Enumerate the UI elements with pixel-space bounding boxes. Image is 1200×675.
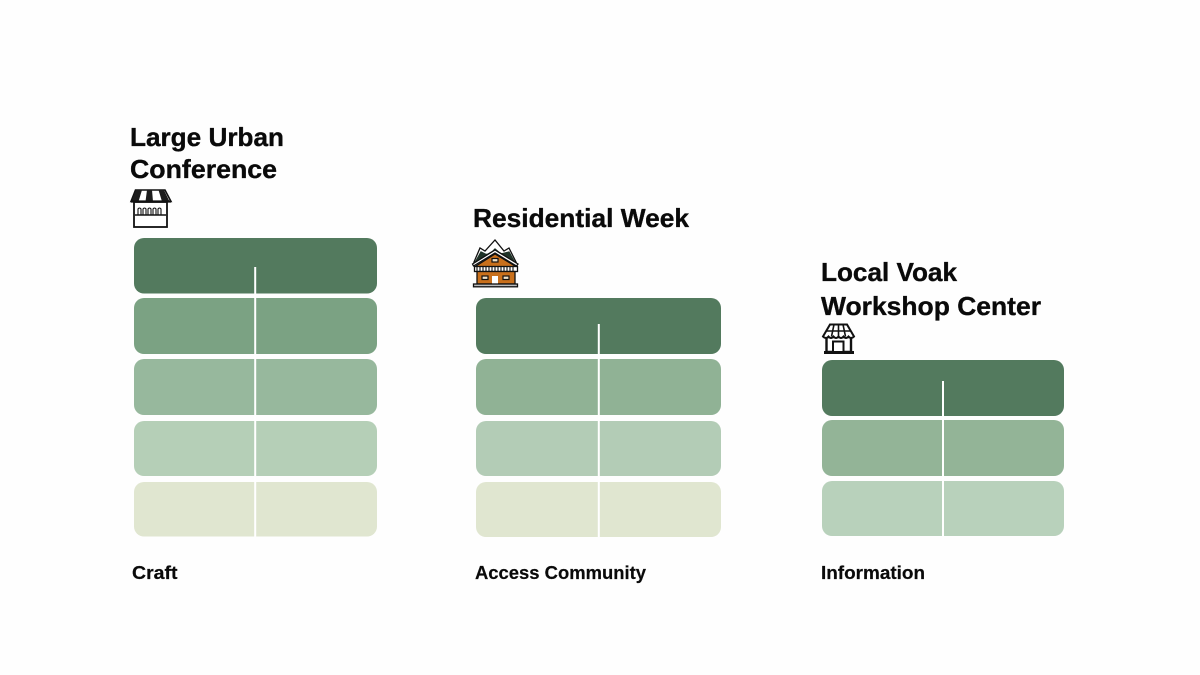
heading: Large Urban Conference [130, 122, 284, 184]
label: Information: Information [821, 563, 925, 583]
label: Access Community: Access Community [475, 563, 646, 583]
chart: five-tier stack [134, 238, 377, 536]
icon: market stall [131, 190, 171, 227]
icon: mountain chalet [472, 240, 518, 287]
heading: Local Voak Workshop Center: Local Voak [821, 257, 958, 287]
heading: Large Urban Conference: Conference [130, 154, 277, 184]
heading: Large Urban Conference: Large Urban [130, 122, 284, 152]
heading: Local Voak Workshop Center: Workshop Center [821, 291, 1041, 321]
panel: Residential Week [472, 203, 721, 583]
label: Craft: Craft [132, 563, 178, 583]
heading: Local Voak Workshop Center [821, 257, 1041, 321]
chart: four-tier stack [476, 298, 721, 537]
panel: Large Urban Conference [130, 122, 377, 583]
icon: storefront [823, 324, 854, 352]
panel: Local Workshop Center [821, 257, 1064, 583]
chart: three-tier stack [822, 360, 1064, 536]
heading: Residential Week: Residential Week [473, 203, 690, 233]
